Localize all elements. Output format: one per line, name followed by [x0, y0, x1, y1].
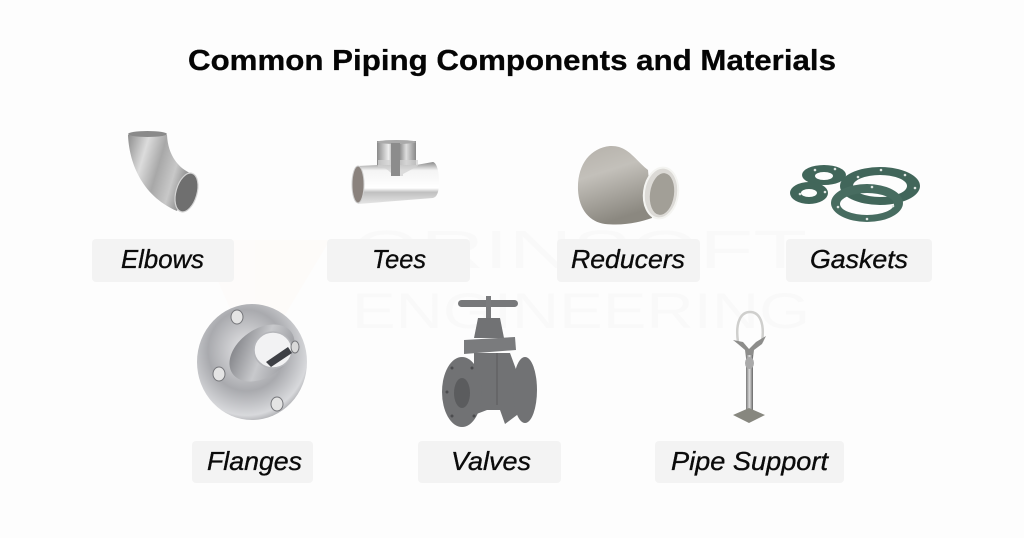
label: Elbows	[92, 239, 234, 282]
label: Reducers: Reducers	[571, 244, 685, 274]
label: Reducers	[557, 239, 700, 282]
label: Pipe Support	[655, 441, 844, 483]
watermark: GRINSOFT	[352, 220, 807, 280]
label: Pipe Support: Pipe Support	[671, 446, 830, 476]
icon: elbow	[128, 131, 202, 215]
icon: gaskets	[790, 165, 920, 222]
label: Gaskets: Gaskets	[810, 244, 908, 274]
watermark: ENGINEERING	[352, 283, 810, 339]
label: Valves: Valves	[451, 446, 531, 476]
label: Flanges: Flanges	[207, 446, 302, 476]
label: Valves	[418, 441, 561, 483]
icon: flange	[197, 304, 307, 420]
label: Tees	[327, 239, 470, 282]
icon: reducer	[578, 146, 681, 225]
title: Common Piping Components and Materials	[188, 45, 836, 77]
icon: tee	[352, 140, 439, 204]
label: Tees: Tees	[372, 244, 426, 274]
label: Gaskets	[786, 239, 932, 282]
label: Elbows: Elbows	[121, 244, 204, 274]
icon: valve	[442, 296, 537, 427]
label: Flanges	[192, 441, 313, 483]
icon: pipe support	[733, 312, 766, 423]
watermark	[200, 220, 810, 340]
